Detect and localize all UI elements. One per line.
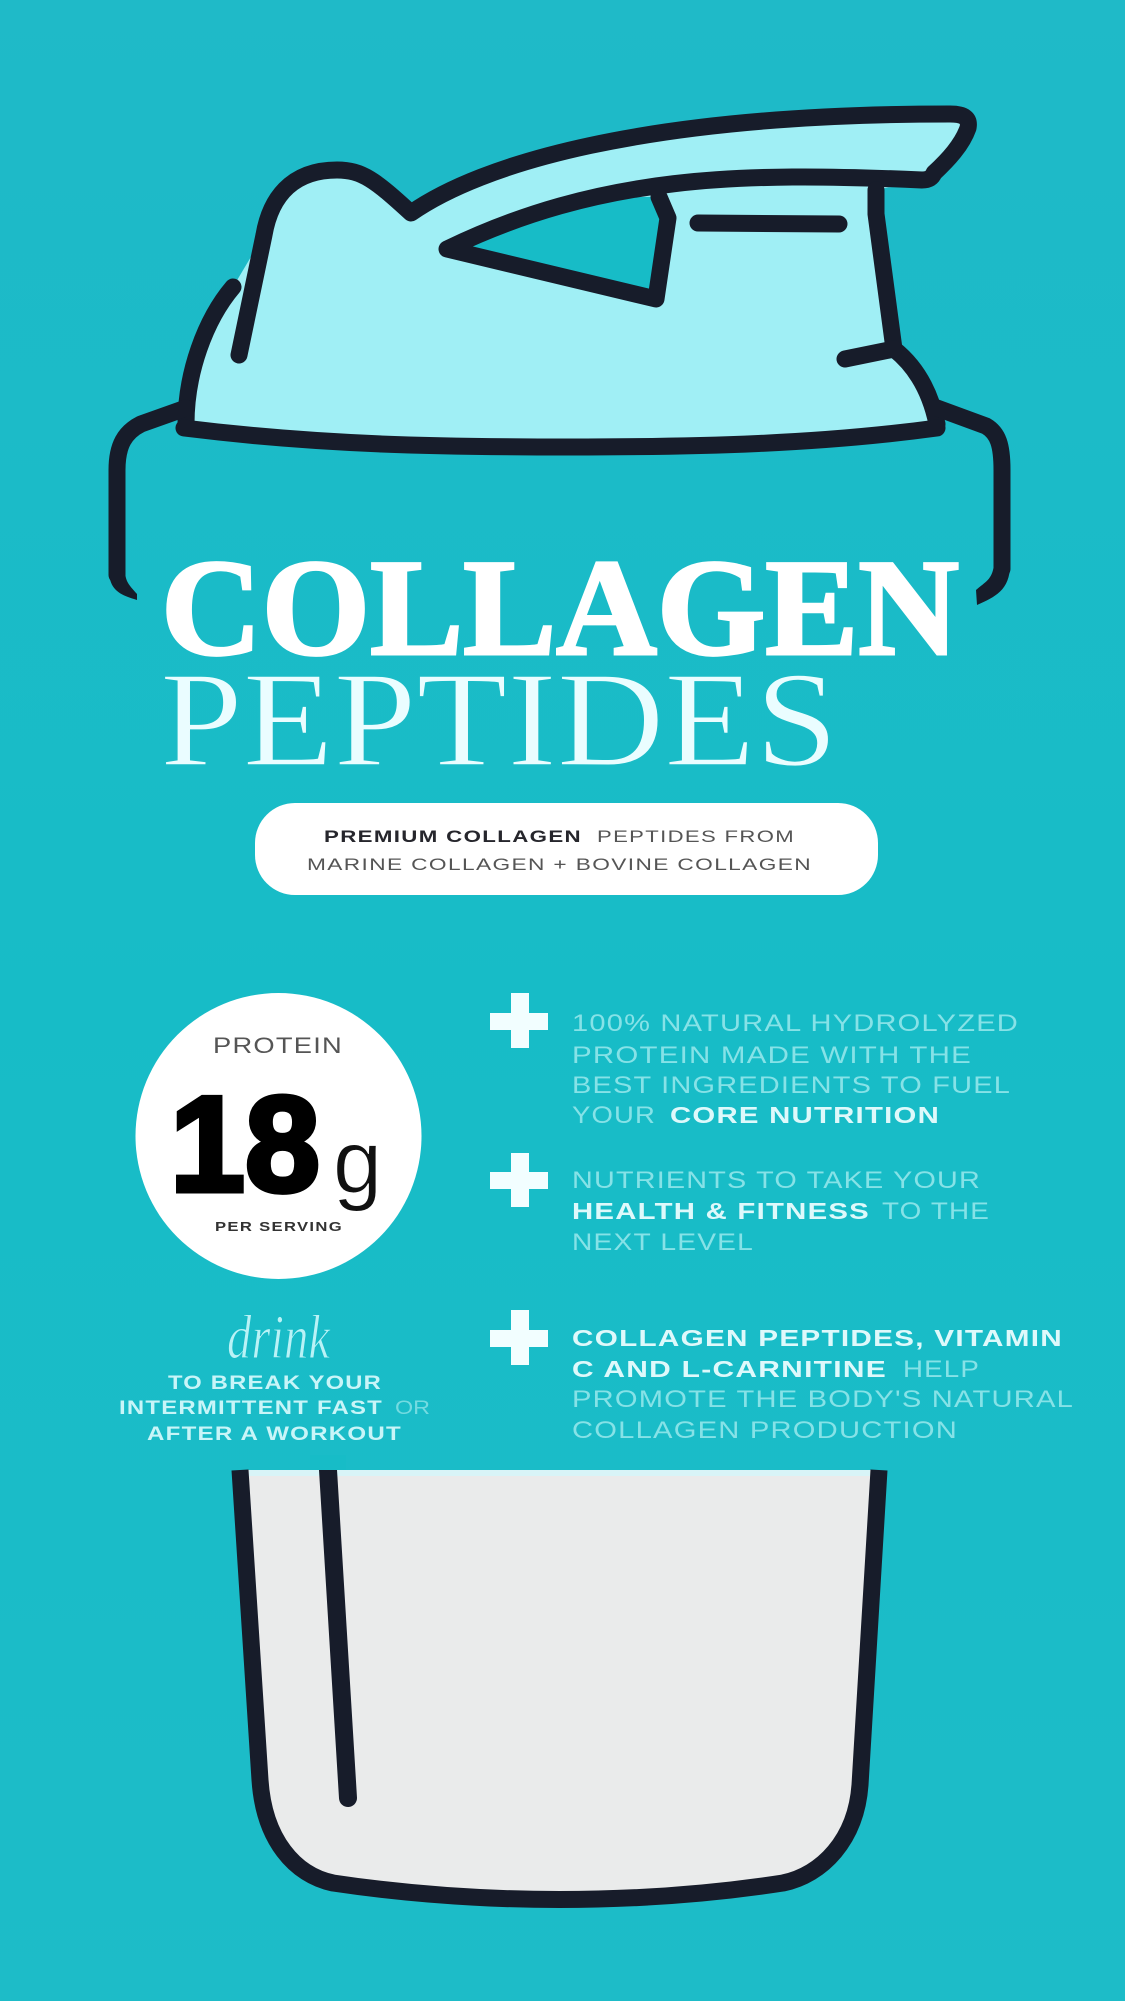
benefit 3: COLLAGEN PRODUCTION <box>572 1417 958 1444</box>
benefit 2 <box>490 1153 990 1256</box>
benefit 1: CORE NUTRITION <box>670 1102 940 1128</box>
drink note: INTERMITTENT FAST <box>119 1397 383 1419</box>
protein badge: PROTEIN <box>213 1033 343 1058</box>
benefit 2: NEXT LEVEL <box>572 1229 754 1256</box>
title: COLLAGEN: COLLAGEN <box>161 531 959 684</box>
benefit 2: TO THE <box>882 1198 990 1225</box>
benefit 3 <box>490 1310 1074 1444</box>
icon: plus <box>490 1153 548 1207</box>
benefit 2: NUTRIENTS TO TAKE YOUR <box>572 1167 981 1194</box>
benefit 3: HELP <box>903 1356 980 1383</box>
protein badge <box>136 993 422 1279</box>
benefit 3: COLLAGEN PEPTIDES, VITAMIN <box>572 1325 1063 1351</box>
icon: plus <box>490 1310 548 1365</box>
protein badge: 18 <box>170 1068 320 1220</box>
protein badge: PER SERVING <box>215 1220 343 1234</box>
benefit 1: BEST INGREDIENTS TO FUEL <box>572 1072 1011 1099</box>
drink note: drink <box>227 1304 331 1372</box>
benefit 1: 100% NATURAL HYDROLYZED <box>572 1010 1019 1037</box>
benefit 3: C AND L-CARNITINE <box>572 1356 887 1382</box>
drink note: AFTER A WORKOUT <box>147 1423 402 1445</box>
drink note <box>119 1304 430 1445</box>
shaker cup <box>240 1455 879 1900</box>
subtitle pill: PREMIUM COLLAGEN <box>324 828 582 846</box>
benefit 2: HEALTH & FITNESS <box>572 1198 870 1224</box>
benefit 1: PROTEIN MADE WITH THE <box>572 1042 972 1069</box>
drink note: TO BREAK YOUR <box>168 1372 382 1394</box>
subtitle pill: MARINE COLLAGEN + BOVINE COLLAGEN <box>307 856 812 874</box>
drink note: OR <box>395 1397 430 1419</box>
protein badge: g <box>333 1113 382 1213</box>
benefit 1: YOUR <box>572 1102 656 1129</box>
icon: plus <box>490 993 548 1048</box>
benefit 3: PROMOTE THE BODY'S NATURAL <box>572 1386 1074 1413</box>
subtitle pill <box>255 803 878 895</box>
title: PEPTIDES: PEPTIDES <box>160 645 838 795</box>
subtitle pill: PEPTIDES FROM <box>597 828 795 846</box>
shaker lid <box>109 114 1010 605</box>
benefit 1 <box>490 993 1019 1129</box>
